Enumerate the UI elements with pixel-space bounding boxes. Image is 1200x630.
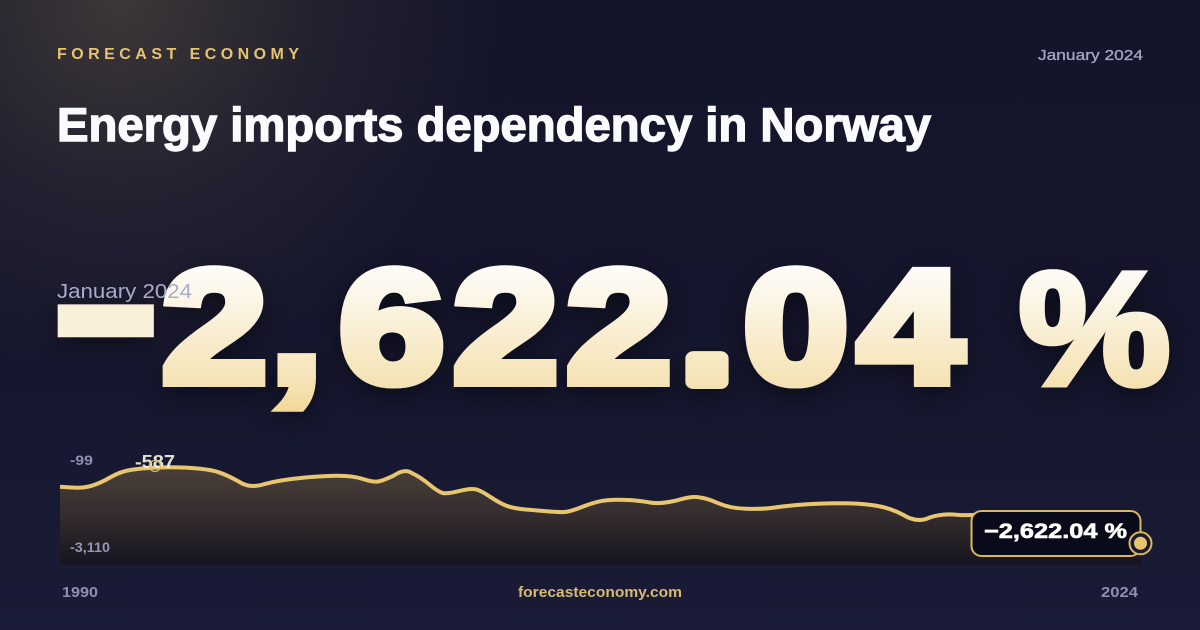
value callout: −2,622.04 % xyxy=(984,520,1127,543)
big value: % xyxy=(1019,239,1170,418)
source website: forecasteconomy.com xyxy=(518,584,682,601)
big value: − xyxy=(50,149,162,485)
x axis start year: 1990 xyxy=(62,584,98,601)
peak marker xyxy=(150,460,160,472)
end point marker xyxy=(1130,532,1152,554)
chart line xyxy=(60,467,1140,543)
chart area fill xyxy=(60,467,1141,565)
y axis max label: -99 xyxy=(70,452,93,468)
big value xyxy=(50,149,1170,485)
big value: 2,622.04 xyxy=(162,238,963,417)
date top right: January 2024 xyxy=(1038,47,1143,64)
value date label: January 2024 xyxy=(57,281,192,303)
peak value label: -587 xyxy=(135,452,175,472)
title: Energy imports dependency in Norway xyxy=(57,98,931,151)
y axis min label: -3,110 xyxy=(70,539,110,555)
brand label: FORECAST ECONOMY xyxy=(57,46,299,63)
value callout xyxy=(972,511,1140,556)
x axis end year: 2024 xyxy=(1101,584,1139,601)
area chart xyxy=(60,452,1152,565)
